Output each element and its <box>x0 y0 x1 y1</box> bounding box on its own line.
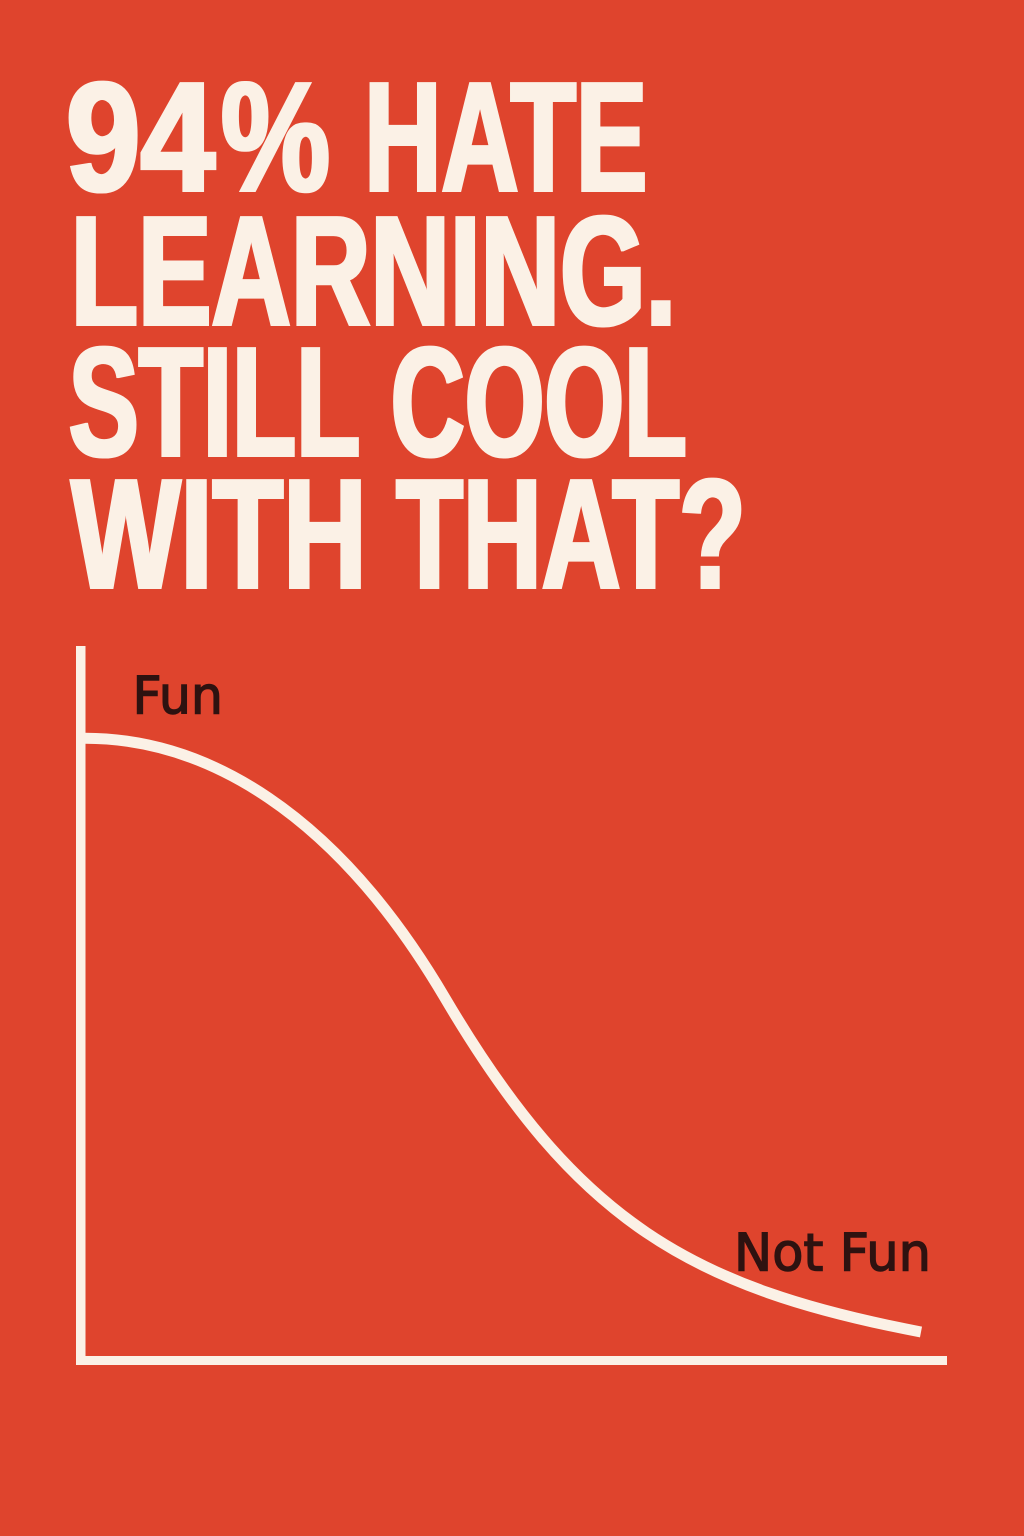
title line 1 <box>66 51 647 225</box>
title <box>66 51 746 622</box>
title line 1: % <box>221 51 330 225</box>
title line 1: 94 <box>66 51 215 225</box>
y axis <box>76 646 86 1365</box>
label: Not Fun: Not Fun <box>734 1224 931 1284</box>
chart: fun decline curve <box>76 646 947 1365</box>
x axis <box>76 1356 947 1365</box>
title line 4 <box>71 448 746 622</box>
curve <box>85 738 921 1332</box>
title line 3: STILL <box>69 316 360 490</box>
title line 3: COOL <box>391 316 687 490</box>
title line 4: THAT? <box>396 448 746 622</box>
title line 2: LEARNING. <box>71 185 676 359</box>
label: Fun: Fun <box>132 666 223 726</box>
title line 4: WITH <box>71 448 367 622</box>
title line 1: HATE <box>364 51 647 225</box>
